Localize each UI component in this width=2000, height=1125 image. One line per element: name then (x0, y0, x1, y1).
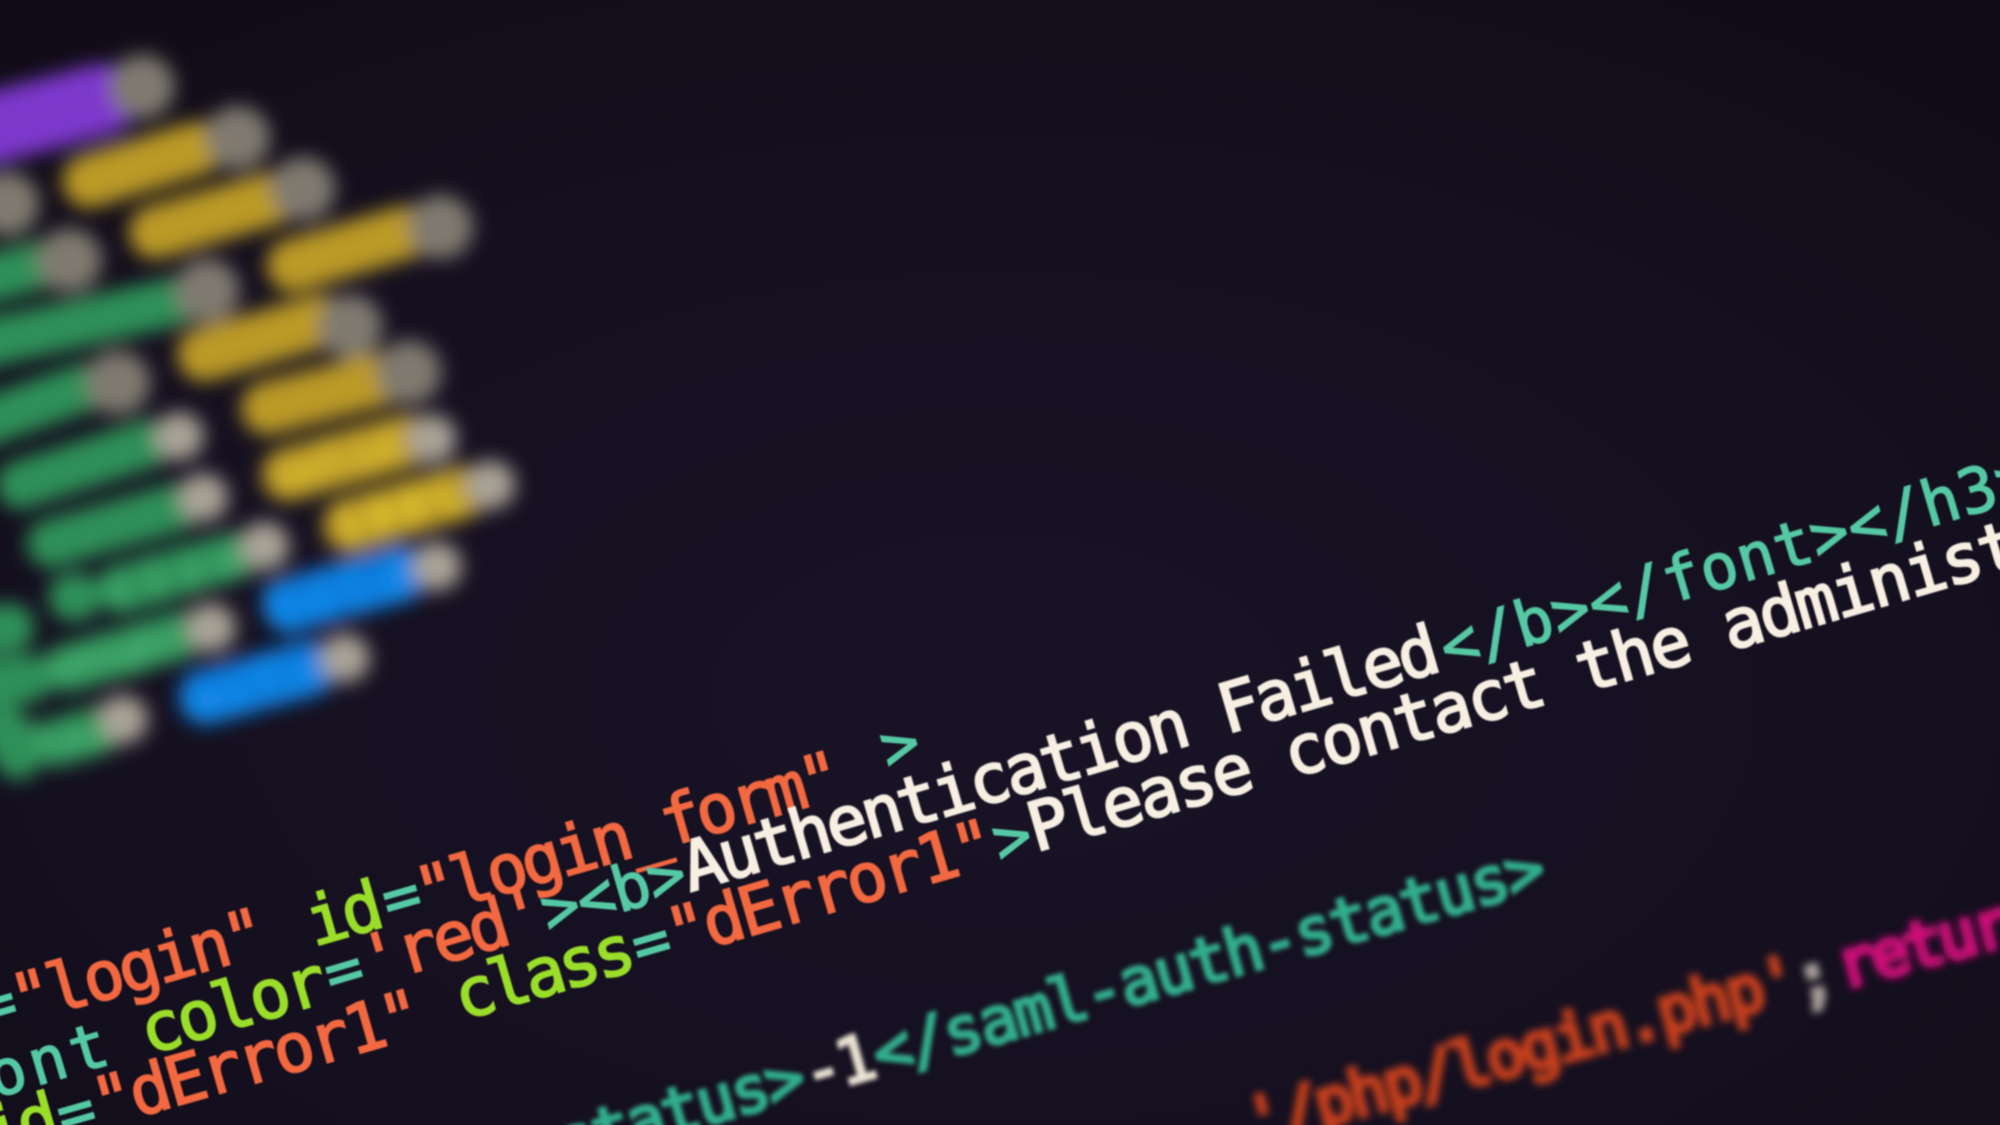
code line: login form (0, 704, 928, 1045)
code line: Authentication Failed: = (315, 930, 372, 1011)
code line: login.php return, out of focus: ; (1786, 938, 1842, 1019)
green properties (0, 265, 235, 755)
blue keywords (207, 574, 401, 696)
code line: Please contact the administrator: Please contact the administ (1018, 504, 2000, 867)
blurred CSS code block, top left: weight (42, 611, 191, 693)
code line: login form: "login_form" (406, 735, 851, 932)
code line: Please contact the administrator: = (623, 902, 679, 983)
blurred CSS code block, top left: auto (175, 635, 328, 735)
code line: saml auth status, slightly out of focus (548, 831, 1553, 1125)
yellow values (89, 148, 462, 526)
code line: Authentication Failed: Authentication Failed (672, 609, 1448, 907)
gray semicolons (6, 87, 441, 383)
blurred CSS code block, top left: size (98, 530, 247, 617)
code line: Please contact the administrator: > (984, 797, 1040, 878)
code line: Authentication Failed: 'red' (351, 872, 554, 1001)
code line: Please contact the administrator (0, 504, 2000, 1125)
code line: Please contact the administrator: "dError1" (657, 803, 1004, 973)
blurred CSS code block, top left (0, 87, 491, 771)
blurred words: bold (257, 540, 420, 644)
code line: login form: "login" (2, 892, 275, 1040)
code line: Please contact the administrator: class (444, 908, 644, 1036)
blurred CSS code block, top left: low (25, 706, 110, 771)
code line: Authentication Failed: ><b> (532, 836, 695, 948)
code line: saml auth status, slightly out of focus: </saml-auth-status> (864, 831, 1553, 1092)
purple selector (0, 99, 102, 133)
code line: Authentication Failed: color (130, 940, 336, 1070)
blurred CSS code block, top left: solid (268, 418, 404, 502)
code line: login.php return, out of focus (1238, 877, 2000, 1125)
code line: saml auth status, slightly out of focus: -1 (794, 1020, 884, 1111)
code line: login form: > (872, 704, 928, 785)
code line: login form: = (373, 856, 429, 937)
code line: login form: id (297, 865, 392, 962)
blurred CSS code block, top left: 100% (328, 469, 465, 553)
code line: Authentication Failed (0, 439, 2000, 1113)
